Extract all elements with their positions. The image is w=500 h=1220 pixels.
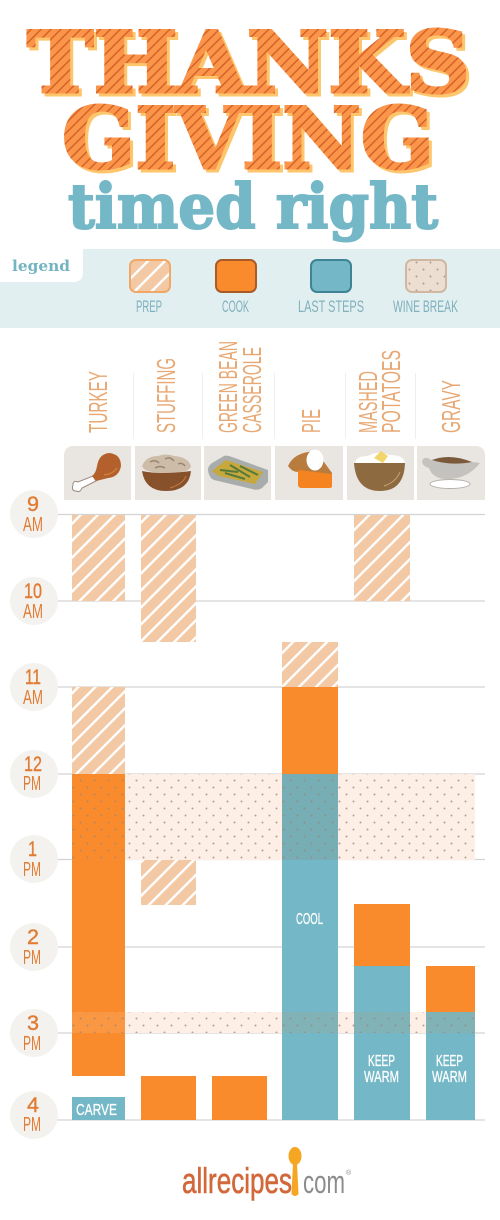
header: gravy: GRAVY [436,380,466,433]
subtitle: timed right: timed right [68,170,438,243]
icon: spoon [288,1147,302,1196]
icon: gravy boat [422,457,480,488]
1 PM [10,835,58,883]
legend item: wine break: WINE BREAK [393,297,458,316]
header: mashed potatoes: MASHED [353,371,383,433]
2 PM [10,923,58,971]
10 AM: 10 [24,580,42,603]
4 PM: 4 [27,1094,39,1117]
bars: gravy: WARM [432,1069,467,1086]
legend item: prep: PREP [136,297,162,316]
legend item: cook [216,260,256,316]
wine break overlay [72,774,475,1033]
bars: pie: COOL [296,911,323,928]
legend item: prep [130,260,170,316]
icon: mashed potatoes bowl [354,451,405,491]
4 PM: PM [23,1114,41,1136]
10 AM [10,577,58,625]
11 AM [10,663,58,711]
logo: allrecipes.com [182,1147,352,1201]
icon: stuffing bowl [142,454,191,491]
bars: mashed potatoes: WARM [364,1069,399,1086]
header: pie: PIE [296,409,326,433]
2 PM: PM [23,947,41,969]
legend item: wine break [393,260,458,316]
legend item: cook: COOK [222,297,249,316]
1 PM: 1 [28,838,37,861]
1 PM: PM [23,859,41,881]
title line: THANKS: THANKS [27,13,470,112]
logo: allrecipes.com: allrecipes [182,1160,292,1201]
2 PM: 2 [27,926,39,949]
9 AM: AM [23,514,43,536]
bars: stuffing [141,515,196,1120]
carve step [72,1097,125,1120]
bars: mashed potatoes [354,515,410,1120]
bars: gravy: KEEP [436,1053,463,1070]
11 AM: 11 [25,666,41,689]
bars: gravy [426,966,475,1120]
header: green bean casserole: CASSEROLE [237,347,267,433]
panel: legend [0,249,500,328]
title [27,13,473,243]
bars: mashed potatoes: KEEP [368,1053,395,1070]
legend item: last steps [298,260,364,316]
title line: GIVING: GIVING [62,89,434,188]
carve step: CARVE [76,1102,117,1119]
header: green bean casserole [213,341,267,433]
icon: turkey leg [72,453,121,492]
3 PM: PM [23,1033,41,1055]
3 PM: 3 [27,1012,39,1035]
header: green bean casserole: GREEN BEAN [213,341,243,433]
legend item: last steps: LAST STEPS [298,297,364,316]
12 PM: 12 [24,753,42,776]
icon: casserole dish [208,456,268,490]
logo: allrecipes.com: ® [346,1169,352,1177]
12 PM: PM [23,773,41,795]
bars: green bean casserole [212,1076,267,1120]
3 PM [10,1009,58,1057]
header: stuffing: STUFFING [151,358,181,433]
legend tab: legend [12,257,71,275]
header: turkey: TURKEY [83,371,113,433]
12 PM [10,750,58,798]
chart: time axis labels [10,490,58,1139]
legend tab [0,249,83,282]
column headers [83,341,466,439]
logo: allrecipes.com: com [303,1164,345,1200]
chart grid lines [57,514,485,1120]
food icon band [64,446,485,500]
bars: pie [282,642,338,1120]
10 AM: AM [23,601,43,623]
4 PM [10,1091,58,1139]
header: mashed potatoes: POTATOES [376,350,406,433]
wine break bands background [72,774,475,1033]
9 AM [10,490,58,538]
header: mashed potatoes [353,350,406,433]
title line: THANKS: THANKS [30,16,473,115]
bars: turkey [72,515,125,1120]
9 AM: 9 [27,493,39,516]
11 AM: AM [23,687,43,709]
title line: GIVING: GIVING [65,92,437,191]
icon: pie slice [288,450,332,488]
